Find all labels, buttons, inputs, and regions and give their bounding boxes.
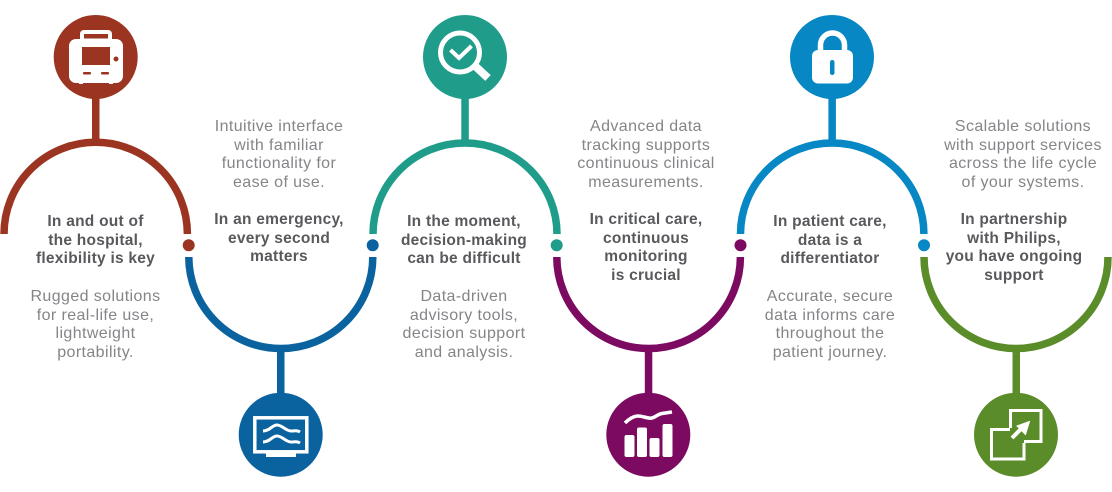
text: patient care heading: data is a [798, 232, 862, 249]
text: intuitive interface [215, 118, 343, 191]
text: scalable solutions: with support services [944, 137, 1102, 154]
text: advanced data tracking: Advanced data [590, 118, 702, 135]
text: scalable solutions: of your systems. [962, 174, 1084, 191]
text: data-driven tools: and analysis. [415, 344, 513, 361]
text: intuitive interface: ease of use. [233, 174, 325, 191]
arc and icon: bar chart with trend line [557, 257, 740, 477]
text: emergency heading: matters [250, 248, 308, 265]
text: data-driven tools: Data-driven [420, 288, 508, 305]
text: data-driven tools: advisory tools, [410, 307, 518, 324]
text: flexibility heading: flexibility is key [36, 250, 155, 267]
text: rugged solutions [30, 288, 161, 361]
text: decision-making heading [401, 213, 527, 267]
text: decision-making heading: In the moment, [407, 213, 521, 230]
junction dot: light blue [918, 239, 930, 251]
text: advanced data tracking [577, 118, 715, 191]
junction dot: red [183, 239, 195, 251]
text: advanced data tracking: continuous clinical [577, 155, 715, 172]
text: data-driven tools: decision support [403, 325, 525, 342]
arc and icon: padlock [740, 15, 924, 234]
text: flexibility heading [36, 213, 155, 267]
text: data-driven tools [403, 288, 525, 361]
text: emergency heading [214, 211, 344, 265]
arc and icon: magnifier with check [373, 15, 557, 234]
junction dot: teal [551, 239, 563, 251]
text: flexibility heading: the hospital, [48, 232, 143, 249]
text: flexibility heading: In and out of [47, 213, 144, 230]
text: accurate secure data: data informs care [765, 307, 895, 324]
text: accurate secure data: throughout the [776, 325, 884, 342]
text: scalable solutions: Scalable solutions [955, 118, 1091, 135]
text: accurate secure data [765, 288, 895, 361]
text: partnership heading: with Philips, [967, 230, 1061, 247]
text: patient care heading [773, 213, 887, 267]
text: partnership heading [946, 211, 1082, 284]
text: critical care heading: monitoring [604, 248, 688, 265]
text: emergency heading: In an emergency, [214, 211, 344, 228]
text: partnership heading: you have ongoing [946, 248, 1082, 265]
text: critical care heading [590, 211, 702, 284]
text: critical care heading: In critical care, [590, 211, 702, 228]
text: critical care heading: is crucial [611, 267, 681, 284]
arc and icon: expanding squares [924, 257, 1108, 477]
text: patient care heading: In patient care, [773, 213, 887, 230]
junction dot: blue [367, 239, 379, 251]
text: advanced data tracking: measurements. [588, 174, 704, 191]
text: decision-making heading: decision-making [401, 232, 527, 249]
arc and icon: vital signs screen [189, 257, 373, 477]
text: partnership heading: In partnership [961, 211, 1067, 228]
text: decision-making heading: can be difficult [407, 250, 521, 267]
text: rugged solutions: Rugged solutions [30, 288, 161, 305]
text: emergency heading: every second [228, 230, 330, 247]
text: intuitive interface: with familiar [234, 137, 324, 154]
text: partnership heading: support [984, 267, 1044, 284]
arc and icon: portable monitor [4, 15, 187, 234]
text: rugged solutions: for real-life use, [37, 307, 154, 324]
text: accurate secure data: patient journey. [773, 344, 887, 361]
text: rugged solutions: portability. [57, 344, 134, 361]
text: patient care heading: differentiator [780, 250, 880, 267]
text: intuitive interface: functionality for [222, 155, 336, 172]
junction dot: purple [734, 239, 746, 251]
text: scalable solutions [944, 118, 1102, 191]
text: advanced data tracking: tracking supports [582, 137, 710, 154]
text: accurate secure data: Accurate, secure [767, 288, 893, 305]
text: critical care heading: continuous [603, 230, 689, 247]
text: intuitive interface: Intuitive interface [215, 118, 343, 135]
text: scalable solutions: across the life cycle [949, 155, 1097, 172]
text: rugged solutions: lightweight [55, 325, 136, 342]
